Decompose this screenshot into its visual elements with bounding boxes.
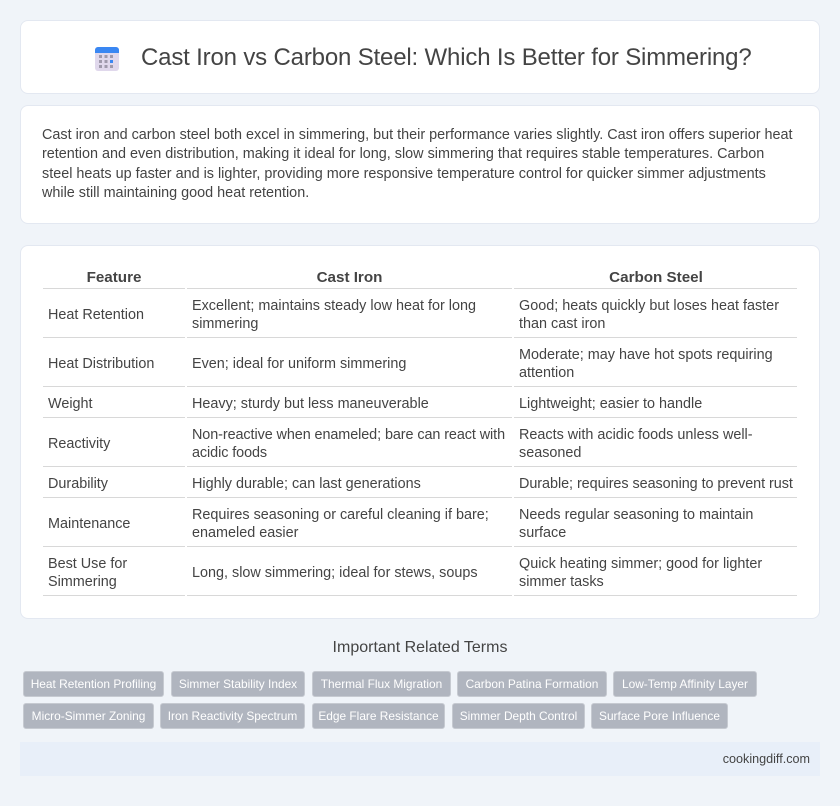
row: heat retention: than cast iron [519,316,605,332]
row: heat distribution: Heat Distribution [48,356,154,372]
intro text: steel heats up faster and is lighter, providing more responsive temperature control for quicker simmer adjustments [42,166,766,182]
row: durability: Durable; requires seasoning to prevent rust [519,476,793,492]
row: reactivity: acidic foods [192,445,267,461]
related terms tags: Thermal Flux Migration [321,677,442,691]
row: reactivity: Reactivity [48,436,110,452]
footer source: cookingdiff.com [723,752,810,766]
panel: header [20,20,820,94]
row: maintenance: Maintenance [48,516,130,532]
heading: related terms: Important Related Terms [333,639,507,656]
table header: Carbon Steel [609,269,703,286]
row: maintenance: Needs regular seasoning to maintain [519,507,753,523]
table header [87,269,703,286]
table header: Cast Iron [317,269,382,286]
row: heat distribution: Even; ideal for uniform simmering [192,356,406,372]
row: heat retention: Excellent; maintains steady low heat for long [192,298,476,314]
intro text: retention and even distribution, making it ideal for long, slow simmering that requires stable temperatures. Carbon [42,146,764,162]
table header: Feature [87,269,141,286]
related terms tags: Low-Temp Affinity Layer [622,677,748,691]
intro text: Cast iron and carbon steel both excel in simmering, but their performance varies slightly. Cast iron offers superior heat [42,127,793,143]
title: Cast Iron vs Carbon Steel: Which Is Better for Simmering? [141,44,752,71]
row: best use [48,556,762,590]
row: heat distribution: attention [519,365,574,381]
row: reactivity: seasoned [519,445,581,461]
row: best use: Long, slow simmering; ideal for stews, soups [192,565,478,581]
related terms tags: Surface Pore Influence [599,709,720,723]
row: maintenance: Requires seasoning or careful cleaning if bare; [192,507,489,523]
row: heat distribution: Moderate; may have hot spots requiring [519,347,773,363]
row: best use: simmer tasks [519,574,604,590]
intro text [42,127,793,201]
row: best use: Simmering [48,574,117,590]
row: heat retention [48,298,779,332]
row: reactivity: Reacts with acidic foods unless well- [519,427,753,443]
row: weight: Weight [48,396,93,412]
row: best use: Quick heating simmer; good for lighter [519,556,762,572]
row: durability [48,476,793,492]
row: weight: Lightweight; easier to handle [519,396,702,412]
row: reactivity [48,427,753,461]
row: reactivity: Non-reactive when enameled; bare can react with [192,427,505,443]
related terms tags: Iron Reactivity Spectrum [168,709,297,723]
row: maintenance: enameled easier [192,525,298,541]
footer [20,742,820,776]
related terms tags: Simmer Stability Index [179,677,297,691]
panel: comparison table [20,245,820,619]
row: maintenance [48,507,753,541]
related terms tags: Micro-Simmer Zoning [32,709,145,723]
row: durability: Highly durable; can last generations [192,476,421,492]
related terms tags: Edge Flare Resistance [318,709,439,723]
icon: calendar [95,47,119,71]
row: weight [48,396,702,412]
row: heat retention: Heat Retention [48,307,144,323]
panel: introduction [20,105,820,224]
row: heat retention: Good; heats quickly but loses heat faster [519,298,779,314]
related terms tags: Heat Retention Profiling [31,677,156,691]
row: heat retention: simmering [192,316,258,332]
row: heat distribution [48,347,773,381]
row: weight: Heavy; sturdy but less maneuverable [192,396,429,412]
related terms tags: Carbon Patina Formation [466,677,598,691]
row: durability: Durability [48,476,108,492]
row: maintenance: surface [519,525,566,541]
row: best use: Best Use for [48,556,127,572]
related terms tags [23,671,757,729]
related terms tags: Simmer Depth Control [460,709,577,723]
intro text: while still maintaining good heat retention. [42,185,309,201]
